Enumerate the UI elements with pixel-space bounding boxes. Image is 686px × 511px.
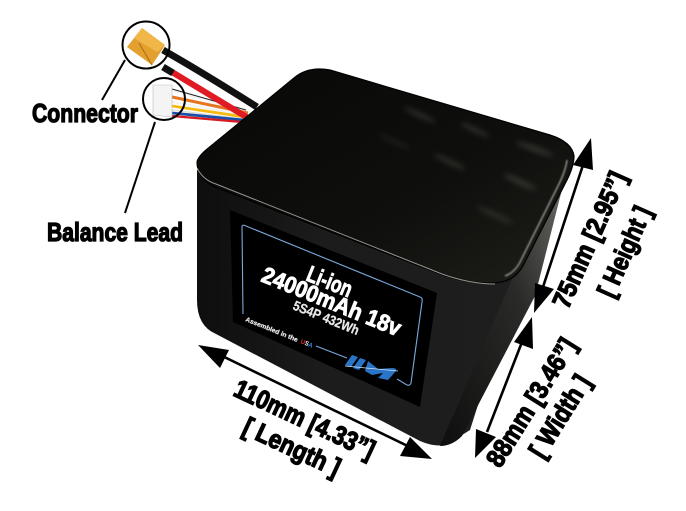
length caption: [ Length ] [238, 411, 345, 482]
height dimension [534, 138, 658, 313]
XT connector plug [127, 28, 165, 65]
length dimension [198, 345, 432, 482]
label assembled in the USA: Assembled in the [244, 316, 299, 344]
logo [345, 355, 398, 380]
connector callout [32, 22, 170, 128]
label USA mark: USA [299, 338, 314, 350]
balance circle [143, 78, 185, 120]
battery top lid [197, 69, 574, 283]
product label [230, 210, 437, 407]
wires: power and balance leads [163, 50, 257, 122]
balance leader line [125, 122, 155, 213]
battery right side [440, 150, 572, 446]
label capacity: 24000mAh 18v [258, 262, 405, 341]
label blue frame [242, 225, 422, 385]
lid highlights [378, 106, 555, 226]
height value: 75mm [2.95”] [546, 167, 633, 312]
width value: 88mm [3.46”] [480, 332, 582, 472]
width caption: [ Width ] [523, 369, 597, 463]
length value: 110mm [4.33”] [229, 373, 380, 465]
label background [230, 210, 437, 407]
connector circle [122, 22, 170, 68]
label title: Li-ion: Li-ion [303, 261, 356, 302]
width dimension [475, 317, 597, 472]
battery front face [197, 170, 521, 445]
lid edge highlight [197, 168, 495, 284]
balance label: Balance Lead [47, 217, 183, 247]
balance plug [153, 85, 172, 117]
balance lead callout [47, 78, 185, 247]
height caption: [ Height ] [591, 202, 658, 301]
label configuration: 5S4P 432Wh [291, 298, 361, 338]
length arrow [198, 345, 432, 459]
width arrow [475, 317, 533, 458]
connector label: Connector [32, 98, 138, 128]
connector leader line [102, 60, 125, 100]
battery body [197, 69, 574, 446]
height arrow [534, 138, 593, 313]
